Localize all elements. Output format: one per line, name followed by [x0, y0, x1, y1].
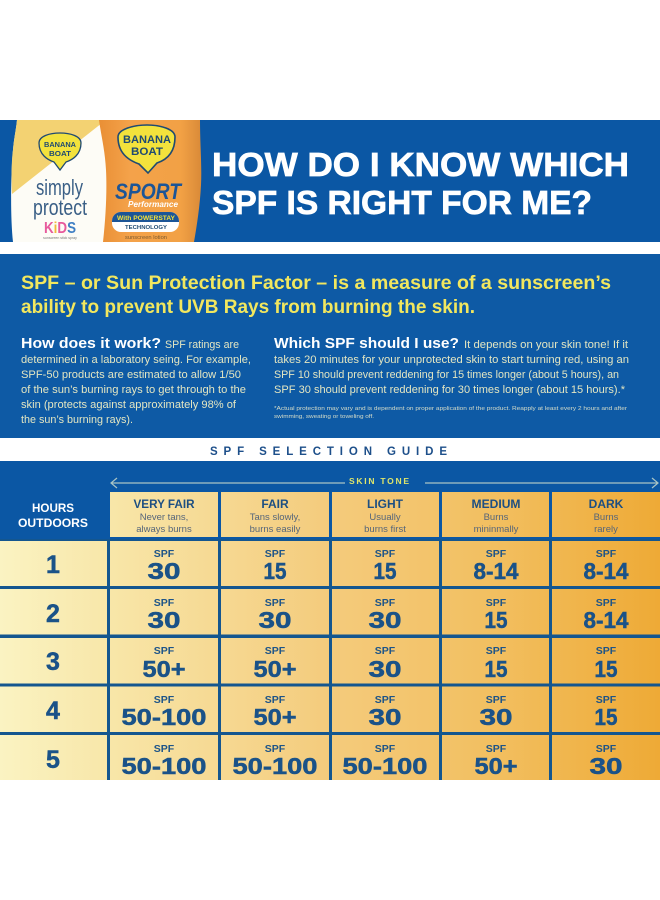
icon: sport performance bottle: BANANA [123, 134, 171, 146]
row: 2 hours: 30 [258, 607, 292, 633]
row: 3 hours: 30 [368, 656, 402, 682]
arrow: skin tone left [111, 478, 345, 488]
panel: SPF explanation [0, 254, 660, 438]
text block: how does it work: determined in a laboratory seing. For example, [21, 354, 251, 366]
row: 4 hours: SPF [265, 694, 286, 706]
header: fair: FAIR [261, 497, 289, 511]
row: 5 hours: SPF [265, 743, 286, 755]
row: 1 hour: 8-14 [474, 558, 519, 584]
label: hours outdoors: HOURS [32, 503, 74, 515]
text block: how does it work [21, 335, 251, 426]
arrow: skin tone right [425, 478, 658, 488]
text block: which SPF should I use [274, 335, 629, 396]
text block: which SPF should I use: Which SPF should I use? [274, 335, 459, 352]
row: 1 hour: 15 [264, 558, 287, 584]
panel: header banner [0, 120, 660, 242]
row: 2 hours: SPF [154, 597, 175, 609]
header: light [332, 492, 439, 537]
row: 2 hours: 30 [148, 607, 180, 633]
row: 5 hours: 50-100 [232, 753, 318, 779]
text block: which SPF should I use: takes 20 minutes for your unprotected skin to start turning red, using an [274, 354, 629, 366]
row: 4 hours: SPF [154, 694, 175, 706]
text block: how does it work: SPF-50 products are estimated to allow 1/50 [21, 369, 241, 381]
header: very fair: Never tans, [140, 512, 188, 523]
header: medium: Burns [484, 512, 509, 523]
text block: how does it work: of the sun’s burning rays to get through to the [21, 384, 246, 396]
footnote [274, 406, 627, 420]
row: 3 hours: 15 [484, 656, 508, 682]
row: 4 hours: 4 [46, 697, 60, 725]
row: 3 hours [0, 638, 660, 684]
header: light: Usually [369, 512, 401, 523]
row: 4 hours: SPF [596, 694, 617, 706]
label: hours outdoors [18, 503, 88, 530]
row: 4 hours: SPF [486, 694, 507, 706]
footnote: swimming, sweating or toweling off. [274, 414, 374, 420]
icon: sport performance bottle: SPORT [115, 179, 182, 204]
text block: how does it work: skin (protects against approximately 98% of [21, 399, 236, 411]
row: 3 hours: 3 [46, 648, 60, 676]
header: light: LIGHT [367, 497, 404, 511]
row: 5 hours: SPF [486, 743, 507, 755]
icon: sport performance bottle: sunscreen lotion [125, 235, 167, 241]
row: 3 hours: SPF [596, 645, 617, 657]
row: 3 hours: SPF [486, 645, 507, 657]
row: 1 hour: SPF [596, 548, 617, 560]
header: fair: Tans slowly, [250, 512, 300, 523]
row: 1 hour: SPF [375, 548, 396, 560]
title: SPF IS RIGHT FOR ME? [212, 184, 592, 221]
row: 5 hours: 50-100 [342, 753, 428, 779]
row: 1 hour: 30 [148, 558, 180, 584]
row: 3 hours: SPF [375, 645, 396, 657]
row: 1 hour: 15 [374, 558, 397, 584]
row: 1 hour: 1 [46, 551, 60, 579]
row: 5 hours: SPF [154, 743, 175, 755]
icon: sport performance bottle: With POWERSTAY [117, 215, 176, 222]
icon: simply protect kids bottle: BANANA [44, 140, 77, 149]
heading: SPF definition: SPF – or Sun Protection Factor – is a measure of a sunscreen’s [21, 272, 611, 294]
icon: sport performance bottle [99, 120, 201, 242]
header: dark: Burns [594, 512, 619, 523]
row: 3 hours: 50+ [142, 656, 186, 682]
row: 5 hours: 50+ [474, 753, 518, 779]
icon: simply protect kids bottle: simply [36, 175, 83, 200]
row: 4 hours: 50-100 [122, 704, 206, 730]
header: medium [442, 492, 549, 537]
text block: how does it work: the sun’s burning rays). [21, 414, 133, 426]
row: 5 hours: 30 [590, 753, 622, 779]
row: 2 hours: SPF [375, 597, 396, 609]
row: 2 hours [0, 589, 660, 634]
row: 3 hours: SPF [265, 645, 286, 657]
row: 5 hours [0, 735, 660, 780]
row: 2 hours: SPF [265, 597, 286, 609]
row: 1 hour: SPF [486, 548, 507, 560]
row: 2 hours: SPF [486, 597, 507, 609]
row: 5 hours: 5 [46, 746, 60, 774]
icon: simply protect kids bottle: KiDS [44, 220, 76, 237]
row: 2 hours: 8-14 [584, 607, 629, 633]
row: 3 hours: 15 [594, 656, 618, 682]
row: 1 hour: SPF [154, 548, 175, 560]
text block: which SPF should I use: It depends on your skin tone! If it [464, 339, 628, 351]
row: 2 hours: SPF [596, 597, 617, 609]
row: 1 hour: SPF [265, 548, 286, 560]
header: dark [552, 492, 660, 537]
row: 5 hours: SPF [375, 743, 396, 755]
row: 2 hours: 2 [46, 600, 60, 628]
row: 4 hours: 30 [480, 704, 512, 730]
label: skin tone: SKIN TONE [349, 476, 409, 486]
row: 3 hours: 50+ [254, 656, 296, 682]
heading: SPF definition: ability to prevent UVB Rays from burning the skin. [21, 296, 475, 318]
row: 4 hours: 50+ [254, 704, 296, 730]
row: 1 hour: 8-14 [584, 558, 629, 584]
panel: SPF table [0, 461, 660, 780]
row: 4 hours: SPF [375, 694, 396, 706]
header: fair [221, 492, 329, 537]
header: medium: mininmally [474, 524, 519, 535]
row: 2 hours: 15 [484, 607, 508, 633]
header: very fair: VERY FAIR [134, 497, 195, 511]
row: 4 hours: 30 [368, 704, 402, 730]
row: 5 hours: SPF [596, 743, 617, 755]
icon: simply protect kids bottle: protect [33, 195, 87, 220]
row: 4 hours: 15 [594, 704, 618, 730]
header: fair: burns easily [250, 524, 301, 535]
row: 5 hours: 50-100 [122, 753, 206, 779]
icon: sport performance bottle: BOAT [131, 146, 163, 158]
text block: which SPF should I use: SPF 10 should prevent reddening for 15 times longer (about 5 hours), an [274, 369, 619, 381]
header: dark: DARK [589, 497, 624, 511]
row: 2 hours: 30 [368, 607, 402, 633]
header: very fair: always burns [136, 524, 192, 535]
text block: which SPF should I use: SPF 30 should prevent reddening for 30 times longer (about 15 hours).* [274, 384, 625, 396]
title [212, 146, 629, 221]
header: very fair [110, 492, 218, 537]
icon: simply protect kids bottle: BOAT [49, 149, 71, 158]
heading: SPF definition [21, 272, 611, 318]
label: hours outdoors: OUTDOORS [18, 518, 88, 530]
footnote: *Actual protection may vary and is dependent on proper application of the product. Reapply at least every 2 hours and after [274, 406, 627, 412]
icon: sport performance bottle: Performance [128, 200, 179, 209]
header: light: burns first [364, 524, 406, 535]
text block: how does it work: How does it work? [21, 335, 161, 352]
icon: simply protect kids bottle: sunscreen stick spray [43, 236, 77, 240]
row: 4 hours [0, 686, 660, 732]
row: 3 hours: SPF [154, 645, 175, 657]
header: dark: rarely [594, 524, 618, 535]
row: 1 hour [0, 541, 660, 586]
icon: sport performance bottle: TECHNOLOGY [125, 225, 168, 231]
text block: how does it work: SPF ratings are [165, 339, 239, 351]
title: HOW DO I KNOW WHICH [212, 146, 629, 183]
header: medium: MEDIUM [472, 497, 520, 511]
heading: SPF selection guide: SPF SELECTION GUIDE [210, 446, 447, 458]
icon: simply protect kids bottle [11, 120, 108, 242]
